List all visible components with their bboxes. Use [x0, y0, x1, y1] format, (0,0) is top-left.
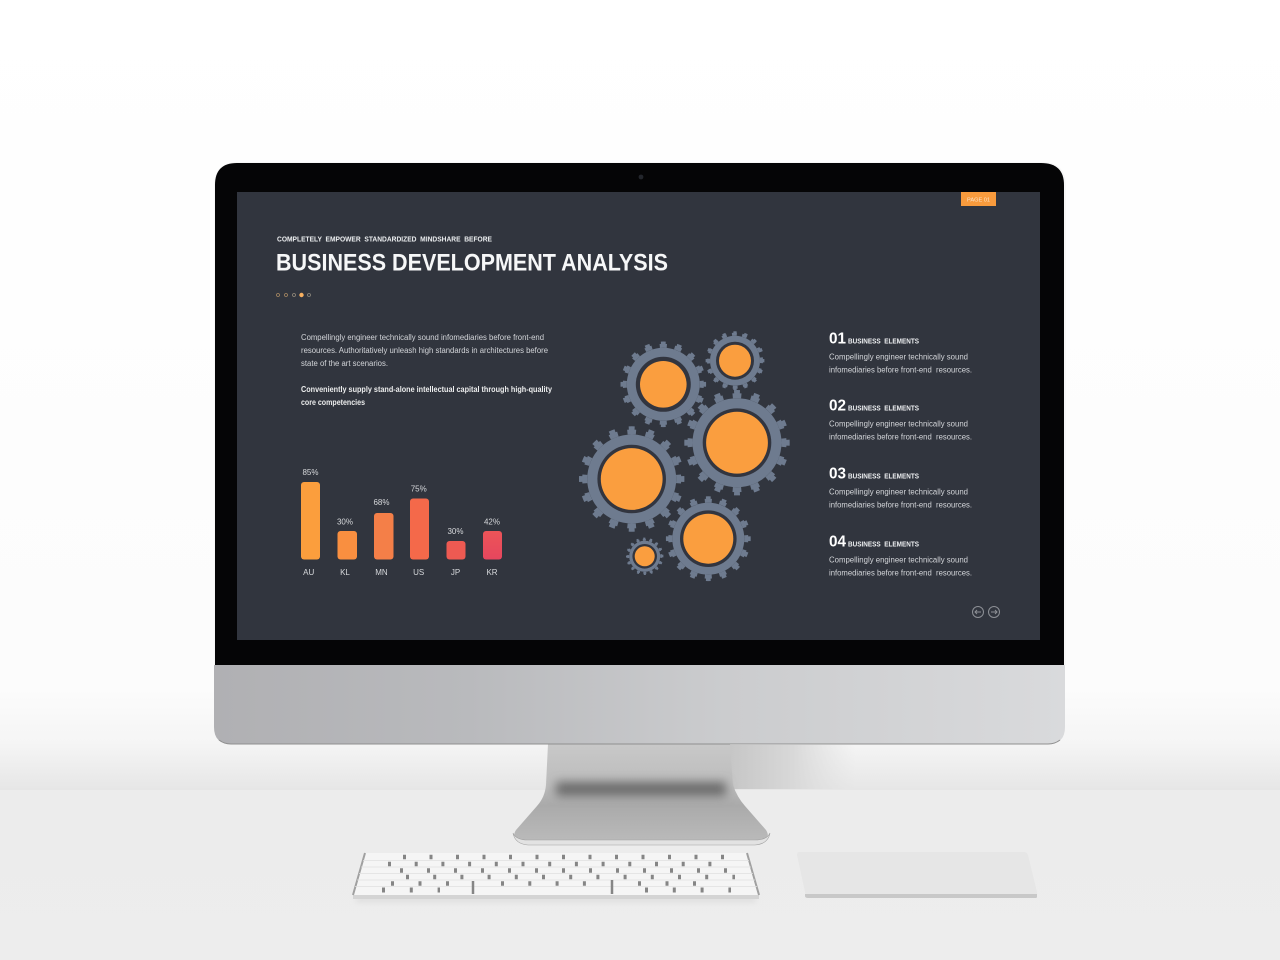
bar JP: 30%: [447, 527, 464, 536]
element 01: [829, 330, 972, 374]
element 02: Compellingly engineer technically sound: [829, 420, 968, 428]
element 03: infomediaries before front-end resources.: [829, 500, 972, 510]
intro paragraph: resources. Authoritatively unleash high standards in architectures before: [301, 346, 549, 355]
title: BUSINESS DEVELOPMENT ANALYSIS: [276, 250, 668, 276]
element 02: BUSINESS ELEMENTS: [848, 406, 919, 412]
bar KL: [337, 518, 357, 577]
element 03: Compellingly engineer technically sound: [829, 488, 968, 496]
bold paragraph: Conveniently supply stand-alone intellectual capital through high-quality: [301, 385, 552, 394]
element 01: Compellingly engineer technically sound: [829, 352, 968, 362]
bold paragraph: [301, 385, 552, 407]
element 02: [829, 398, 972, 442]
element 03: BUSINESS ELEMENTS: [848, 474, 919, 480]
bold paragraph: core competencies: [301, 398, 365, 407]
bar AU: AU: [303, 568, 314, 577]
element 02: infomediaries before front-end resources.: [829, 432, 972, 442]
icon: next arrow: [988, 606, 1000, 618]
bar AU: 85%: [302, 468, 319, 477]
gear: top right: [707, 332, 763, 389]
gear: left large: [581, 429, 682, 529]
element 04: 04: [829, 534, 846, 550]
element 04: Compellingly engineer technically sound: [829, 556, 968, 564]
bar KR: KR: [486, 568, 498, 577]
trackpad: [797, 852, 1037, 898]
element 03: [829, 466, 972, 510]
bar KR: [483, 518, 502, 577]
element 01: BUSINESS ELEMENTS: [848, 338, 919, 346]
element 02: 02: [829, 398, 846, 414]
bar MN: MN: [375, 568, 388, 577]
icon: previous arrow: [972, 606, 984, 618]
pagination dots: [276, 293, 310, 297]
monitor chin: [214, 665, 1065, 744]
gear: top middle: [622, 343, 704, 425]
page tag: PAGE 01: [967, 198, 990, 204]
element 01: 01: [829, 330, 846, 348]
element 01: infomediaries before front-end resources.: [829, 366, 972, 374]
bar AU: [301, 468, 320, 577]
bar JP: [446, 527, 466, 577]
bar US: US: [413, 568, 424, 577]
element 04: BUSINESS ELEMENTS: [848, 542, 919, 548]
bar KL: KL: [340, 568, 350, 577]
bar chart: [301, 468, 502, 577]
navigation arrows: [972, 606, 1000, 618]
bar US: [410, 484, 429, 577]
monitor bezel: [214, 162, 1066, 665]
bar MN: [373, 498, 394, 577]
element 04: [829, 534, 972, 578]
gear: small: [627, 538, 662, 574]
bar MN: 68%: [373, 498, 390, 507]
gears illustration: [581, 332, 787, 579]
element 03: 03: [829, 466, 846, 482]
bar US: 75%: [411, 484, 427, 494]
element 04: infomediaries before front-end resources.: [829, 568, 972, 578]
gear: bottom: [668, 498, 749, 579]
intro paragraph: state of the art scenarios.: [301, 359, 388, 368]
monitor stand: [513, 744, 770, 845]
camera: [639, 175, 643, 179]
page tag: [961, 192, 996, 206]
intro paragraph: [301, 333, 549, 368]
intro paragraph: Compellingly engineer technically sound infomediaries before front-end: [301, 333, 544, 342]
bar JP: JP: [451, 568, 460, 577]
gear: right large: [687, 392, 787, 493]
bar KR: 42%: [484, 518, 500, 526]
element list: [829, 330, 972, 578]
keyboard: [353, 853, 759, 902]
slide screen: [237, 192, 1040, 640]
monitor: [214, 162, 1066, 744]
bar KL: 30%: [337, 518, 353, 526]
subtitle: COMPLETELY EMPOWER STANDARDIZED MINDSHARE BEFORE: [277, 234, 492, 244]
